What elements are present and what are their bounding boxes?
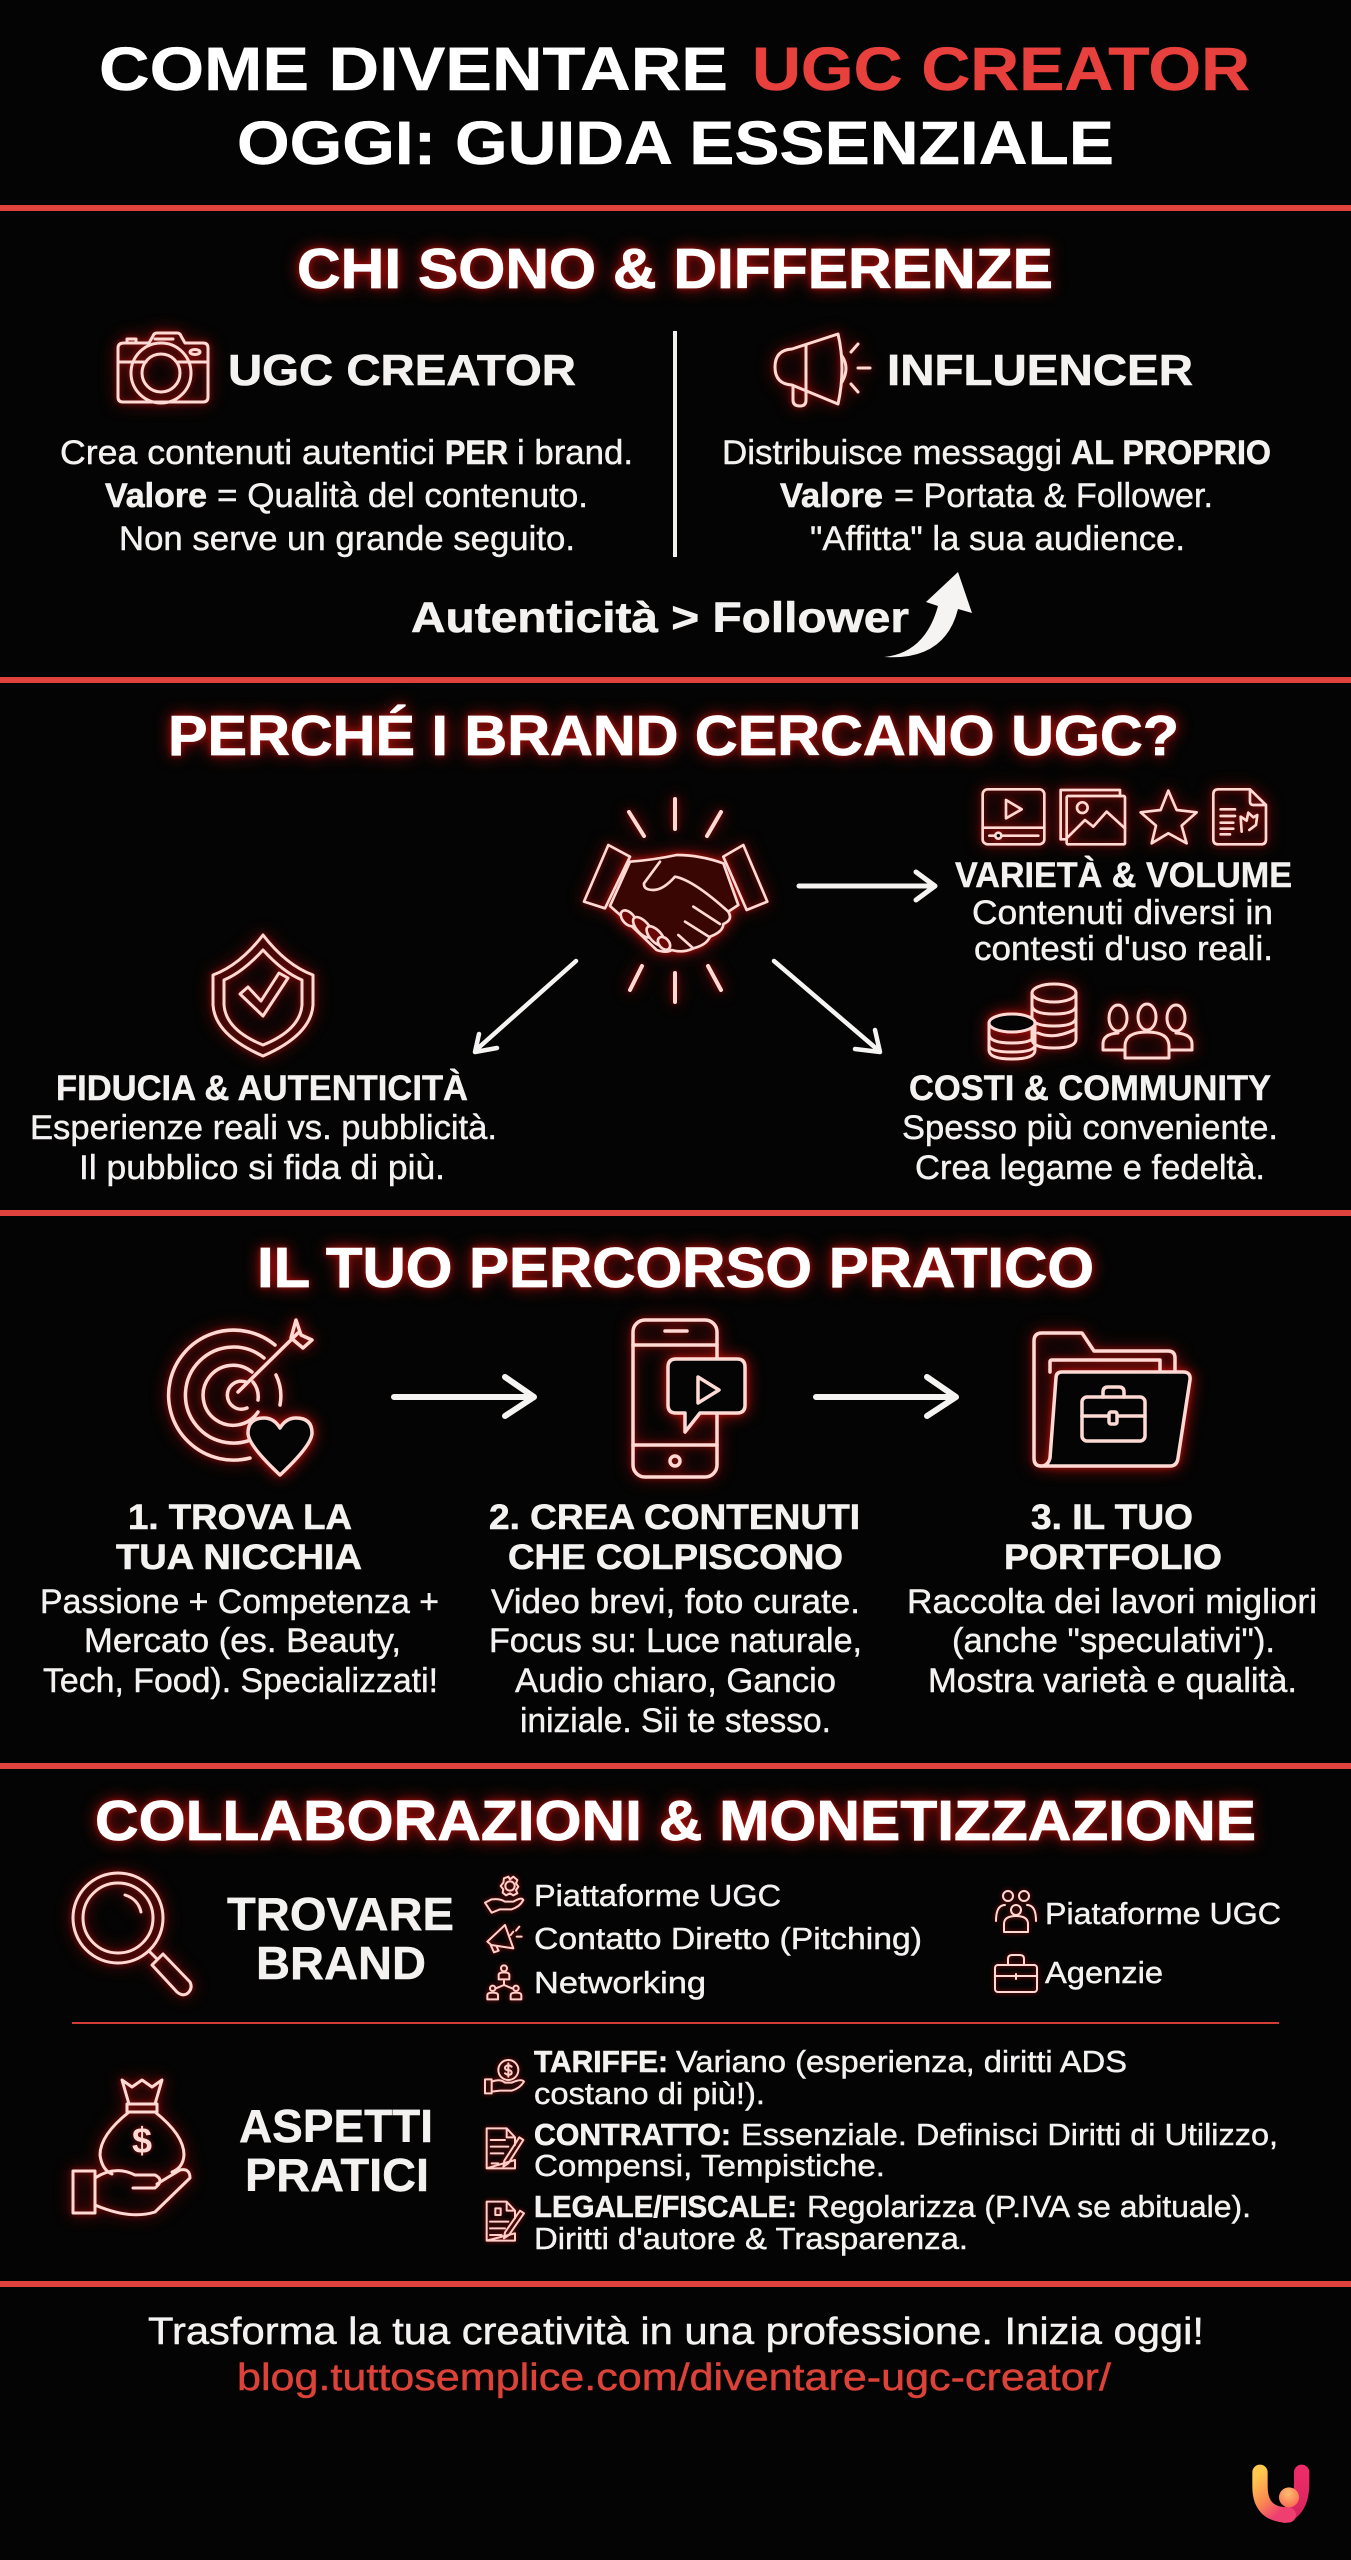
step 2: CHE COLPISCONO <box>508 1538 843 1577</box>
text: ugc creator description: Valore <box>105 477 207 515</box>
text: varieta e volume: contesti d'uso reali. <box>974 930 1273 968</box>
icon: shield <box>213 935 313 1056</box>
dollar sign: $ <box>132 2120 152 2161</box>
icon: money bag <box>73 2080 190 2215</box>
step 3 <box>907 1498 1317 1700</box>
icon: handshake <box>584 799 767 1002</box>
list: platforms and agencies: Agenzie <box>1045 1955 1163 1990</box>
icon: community <box>1103 1004 1192 1058</box>
text: influencer description: "Affitta" la sua audience. <box>810 520 1185 558</box>
icon: coins <box>989 984 1076 1059</box>
panel: chi sono e differenze <box>60 237 1271 657</box>
step 1: TUA NICCHIA <box>116 1538 362 1577</box>
icon: portfolio folder <box>1034 1333 1190 1466</box>
label: aspetti pratici: PRATICI <box>245 2149 429 2201</box>
list icons: rate, contract, legal <box>485 2060 524 2241</box>
panel: perche i brand cercano ugc <box>30 704 1292 1187</box>
text: influencer description: AL PROPRIO <box>1071 434 1271 472</box>
list: finding brands <box>534 1878 922 2000</box>
footer call to action: blog.tuttosemplice.com/diventare-ugc-creator/ <box>237 2357 1111 2399</box>
list: platforms and agencies <box>1045 1896 1281 1990</box>
title <box>99 35 1250 177</box>
list: practical aspects: LEGALE/FISCALE: <box>534 2189 797 2224</box>
title: UGC CREATOR <box>752 35 1250 103</box>
step 3: (anche "speculativi"). <box>952 1622 1275 1660</box>
list: practical aspects: TARIFFE: <box>534 2044 668 2079</box>
step 3: PORTFOLIO <box>1004 1538 1222 1577</box>
step 2: iniziale. Sii te stesso. <box>520 1702 831 1740</box>
text: varieta e volume: Contenuti diversi in <box>972 894 1273 932</box>
subheading: ugc creator: UGC CREATOR <box>228 346 576 395</box>
list: practical aspects: Essenziale. Definisci Diritti di Utilizzo, <box>741 2117 1278 2152</box>
arrow: to varieta <box>799 872 935 900</box>
step 3: Raccolta dei lavori migliori <box>907 1583 1317 1621</box>
text: ugc creator description: i brand. <box>517 434 633 472</box>
text: ugc creator description: = Qualità del contenuto. <box>217 477 588 515</box>
text: influencer description: = Portata & Follower. <box>894 477 1213 515</box>
arrow: step 2 to 3 <box>816 1377 956 1416</box>
label: trovare brand: TROVARE <box>227 1888 454 1940</box>
arrow: to fiducia <box>475 961 576 1052</box>
list: practical aspects <box>534 2044 1278 2256</box>
list icons: platforms, megaphone, network <box>485 1877 523 1999</box>
text: ugc creator description <box>60 434 633 558</box>
icon: magnifier <box>73 1873 191 1995</box>
label: aspetti pratici <box>239 2100 433 2201</box>
step 1 <box>40 1498 439 1700</box>
text: fiducia: Esperienze reali vs. pubblicità. <box>30 1109 497 1147</box>
icon: camera <box>118 333 208 403</box>
step 1: 1. TROVA LA <box>128 1498 352 1537</box>
text: varieta e volume: VARIETÀ & VOLUME <box>955 855 1292 895</box>
heading: perche: PERCHÉ I BRAND CERCANO UGC? <box>168 704 1179 768</box>
heading: collaborazioni: COLLABORAZIONI & MONETIZZAZIONE <box>95 1789 1256 1853</box>
icon: megaphone <box>775 334 870 406</box>
step 1: Passione + Competenza + <box>40 1583 439 1621</box>
text: fiducia <box>30 1068 497 1187</box>
panel: percorso pratico <box>40 1236 1317 1740</box>
step 2: Audio chiaro, Gancio <box>515 1662 836 1700</box>
step 3: Mostra varietà e qualità. <box>928 1662 1297 1700</box>
label: trovare brand: BRAND <box>256 1937 426 1989</box>
icon: briefcase small <box>995 1955 1037 1992</box>
step 3: 3. IL TUO <box>1031 1498 1193 1537</box>
icon: phone with video <box>633 1320 745 1477</box>
list: practical aspects: Compensi, Tempistiche. <box>534 2148 885 2183</box>
list: finding brands: Networking <box>534 1965 706 2000</box>
step 2 <box>489 1498 862 1740</box>
heading: chi sono: CHI SONO & DIFFERENZE <box>297 237 1053 301</box>
step 1: Tech, Food). Specializzati! <box>43 1662 438 1700</box>
step 2: Focus su: Luce naturale, <box>489 1622 862 1660</box>
text: fiducia: Il pubblico si fida di più. <box>79 1149 445 1187</box>
step 2: Video brevi, foto curate. <box>491 1583 860 1621</box>
text: influencer description: Distribuisce messaggi <box>722 434 1062 472</box>
step 2: 2. CREA CONTENUTI <box>489 1498 860 1537</box>
text: ugc creator description: Crea contenuti autentici <box>60 434 435 472</box>
list: practical aspects: Variano (esperienza, diritti ADS <box>676 2044 1127 2079</box>
text: ugc creator description: PER <box>445 434 508 472</box>
icons: content types <box>983 789 1266 844</box>
panel: collaborazioni e monetizzazione <box>72 1789 1281 2256</box>
label: aspetti pratici: ASPETTI <box>239 2100 433 2152</box>
list: platforms and agencies: Piataforme UGC <box>1045 1896 1281 1931</box>
arrow: to costi <box>774 961 880 1052</box>
logo <box>1260 2472 1302 2515</box>
text: ugc creator description: Non serve un grande seguito. <box>119 520 575 558</box>
list: practical aspects: costano di più!). <box>534 2076 765 2111</box>
list: finding brands: Piattaforme UGC <box>534 1878 781 1913</box>
text: costi: Crea legame e fedeltà. <box>915 1149 1265 1187</box>
title: COME DIVENTARE <box>99 35 728 103</box>
icon: people small <box>996 1891 1036 1932</box>
text: fiducia: FIDUCIA & AUTENTICITÀ <box>56 1068 468 1108</box>
text: costi: Spesso più conveniente. <box>902 1109 1278 1147</box>
text: varieta e volume <box>955 855 1292 968</box>
list: practical aspects: Regolarizza (P.IVA se abituale). <box>807 2189 1251 2224</box>
icon: target with heart <box>169 1320 312 1475</box>
heading: percorso: IL TUO PERCORSO PRATICO <box>257 1236 1094 1300</box>
footer call to action: Trasforma la tua creatività in una professione. Inizia oggi! <box>148 2311 1204 2353</box>
list: practical aspects: CONTRATTO: <box>534 2117 731 2152</box>
list: finding brands: Contatto Diretto (Pitching) <box>534 1921 922 1956</box>
label: trovare brand <box>227 1888 454 1989</box>
text: costi: COSTI & COMMUNITY <box>909 1069 1271 1108</box>
arrow: curved up <box>884 572 972 657</box>
text: influencer description: Valore <box>780 477 883 515</box>
text: costi <box>902 1069 1278 1187</box>
list: practical aspects: Diritti d'autore & Trasparenza. <box>534 2221 968 2256</box>
text: influencer description <box>722 434 1271 558</box>
arrow: step 1 to 2 <box>394 1377 534 1416</box>
subheading: influencer: INFLUENCER <box>887 346 1193 395</box>
title: OGGI: GUIDA ESSENZIALE <box>237 109 1114 177</box>
footer call to action <box>148 2311 1204 2399</box>
callout: autenticita: Autenticità > Follower <box>411 594 909 642</box>
step 1: Mercato (es. Beauty, <box>84 1622 401 1660</box>
